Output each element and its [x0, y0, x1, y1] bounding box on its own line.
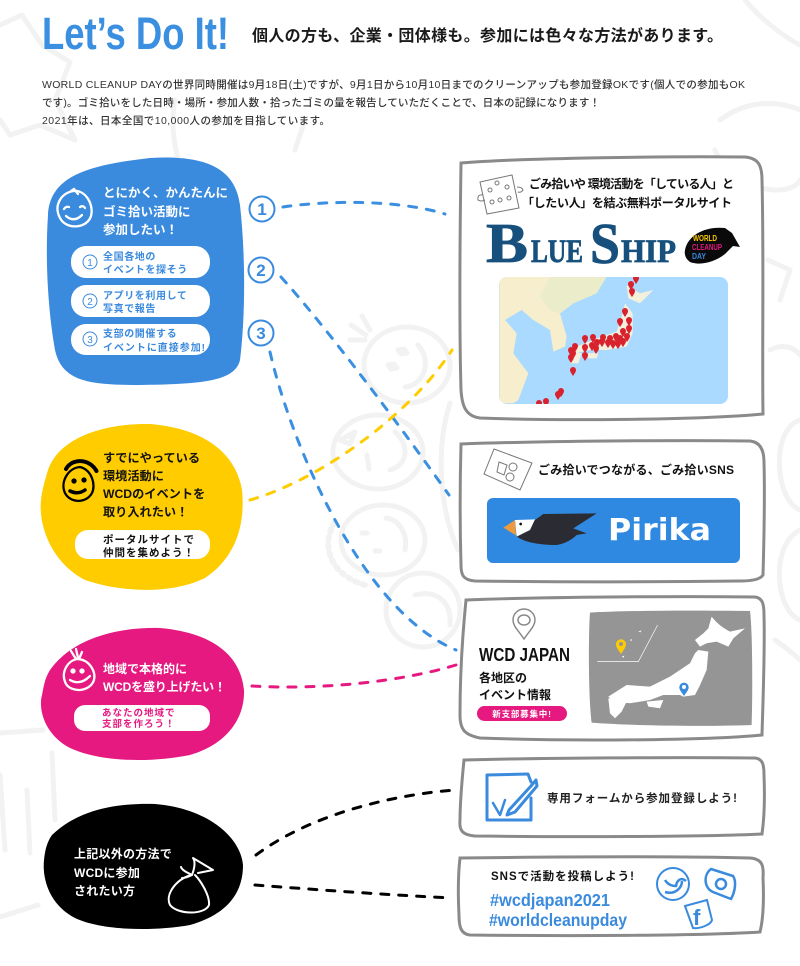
subtitle: 個人の方も、企業・団体様も。参加には色々な方法があります。: [252, 26, 723, 45]
option 3: 支部の開催する: [103, 327, 177, 340]
heading: 「したい人」を結ぶ無料ポータルサイト: [522, 195, 732, 210]
button: あなたの地域で: [102, 707, 176, 719]
icon: sprout face: [64, 649, 94, 690]
option 1: 全国各地の: [103, 250, 156, 263]
logo: World Cleanup Day: [685, 228, 740, 264]
heading: [103, 451, 205, 519]
connector lines: [250, 202, 456, 898]
heading: 地域で本格的に: [103, 661, 187, 676]
description: [479, 670, 551, 702]
heading: [74, 846, 172, 898]
title: Let’s Do It!: [42, 8, 229, 59]
heading: されたい方: [74, 883, 135, 898]
logo: Pirika: Pirika: [608, 513, 711, 548]
heading: ごみ拾いや 環境活動を「している人」と: [529, 176, 734, 191]
option 1: [71, 246, 210, 278]
icon: twitter: [657, 868, 689, 900]
panel: SNS: [458, 857, 763, 936]
text: 2: [256, 261, 266, 280]
heading: SNSで活動を投稿しよう!: [491, 869, 634, 883]
logo: World Cleanup Day: WORLD: [693, 234, 717, 243]
hashtags: #worldcleanupday: [489, 910, 627, 930]
panel: Pirika: [460, 441, 764, 582]
button: 仲間を集めよう！: [103, 546, 195, 559]
badge: 新支部募集中!: [492, 709, 552, 719]
icon: facebook: [685, 900, 712, 930]
option 2: 2: [87, 297, 93, 308]
icon: checkbox and pen: [487, 774, 537, 820]
icon: board: [484, 449, 532, 490]
logo: Blue Ship: B: [486, 213, 528, 275]
panel: black persona: [44, 804, 243, 929]
heading: [103, 661, 226, 694]
button: 支部を作ろう！: [102, 718, 176, 730]
heading: WCDに参加: [74, 865, 140, 880]
logo: Blue Ship: S: [590, 211, 620, 276]
map: event pins: [499, 275, 728, 409]
button: [75, 530, 210, 559]
logo: Pirika: [487, 498, 740, 563]
option 1: イベントを探そう: [103, 263, 188, 276]
panel: registration form: [460, 758, 764, 837]
heading: 参加したい！: [103, 222, 178, 237]
description: イベント情報: [479, 687, 551, 702]
heading: [522, 176, 734, 210]
icon: smiling face: [58, 189, 92, 226]
logo: World Cleanup Day: CLEANUP: [692, 243, 723, 252]
intro text: 2021年は、日本全国で10,000人の参加を目指しています。: [42, 114, 330, 127]
hashtags: [489, 890, 627, 930]
text: 専用フォームから参加登録しよう!: [547, 791, 737, 805]
option 3: イベントに直接参加!: [103, 341, 205, 354]
option 1: 1: [87, 258, 93, 269]
logo: World Cleanup Day: DAY: [692, 252, 707, 261]
intro text: [42, 78, 745, 127]
panel: WCD Japan: [460, 597, 764, 740]
text: 3: [256, 324, 266, 343]
heading: ゴミ拾い活動に: [103, 204, 191, 219]
panel: Blue Ship: [460, 157, 763, 420]
panel: blue persona: [47, 158, 244, 385]
heading: [103, 186, 228, 237]
option 2: アプリを利用して: [103, 289, 188, 302]
badge: [477, 706, 567, 721]
heading: ごみ拾いでつながる、ごみ拾いSNS: [538, 462, 734, 477]
logo: Blue Ship: HIP: [621, 234, 676, 270]
heading: WCDを盛り上げたい！: [103, 679, 226, 694]
heading: 取り入れたい！: [103, 505, 188, 519]
heading: 上記以外の方法で: [74, 846, 172, 861]
icon: location pin: [513, 609, 535, 639]
text: 1: [257, 200, 267, 219]
option 2: [71, 285, 210, 317]
logo: Blue Ship: [486, 211, 676, 276]
icon: trash bag: [169, 858, 213, 912]
intro text: WORLD CLEANUP DAYの世界同時開催は9月18日(土)ですが、9月1日から10月10日までのクリーンアップも参加登録OKです(個人での参加もOK: [42, 78, 745, 91]
map: Japan: [589, 611, 752, 726]
icon: curly hair face: [63, 461, 97, 501]
panel: pink persona: [41, 628, 244, 760]
heading: とにかく、かんたんに: [103, 186, 228, 200]
option 3: 3: [87, 335, 93, 346]
icon: facebook: f: [693, 905, 701, 930]
icon: map sheet: [478, 175, 523, 214]
button: [74, 705, 210, 731]
heading: すでにやっている: [103, 451, 200, 465]
description: 各地区の: [479, 670, 527, 685]
logo: Blue Ship: LUE: [531, 234, 583, 270]
panel: yellow persona: [41, 424, 243, 590]
heading: WCDのイベントを: [103, 487, 205, 501]
icon: instagram: [706, 869, 735, 899]
intro text: です)。ゴミ拾いをした日時・場所・参加人数・拾ったゴミの量を報告していただくことで、日本の記録になります！: [42, 96, 600, 109]
numbered markers: [248, 196, 274, 346]
option 2: 写真で報告: [103, 302, 156, 315]
button: ポータルサイトで: [103, 534, 195, 546]
hashtags: #wcdjapan2021: [490, 890, 610, 910]
option 3: [71, 324, 210, 355]
heading: 環境活動に: [103, 468, 164, 483]
heading: WCD JAPAN: [479, 645, 570, 665]
